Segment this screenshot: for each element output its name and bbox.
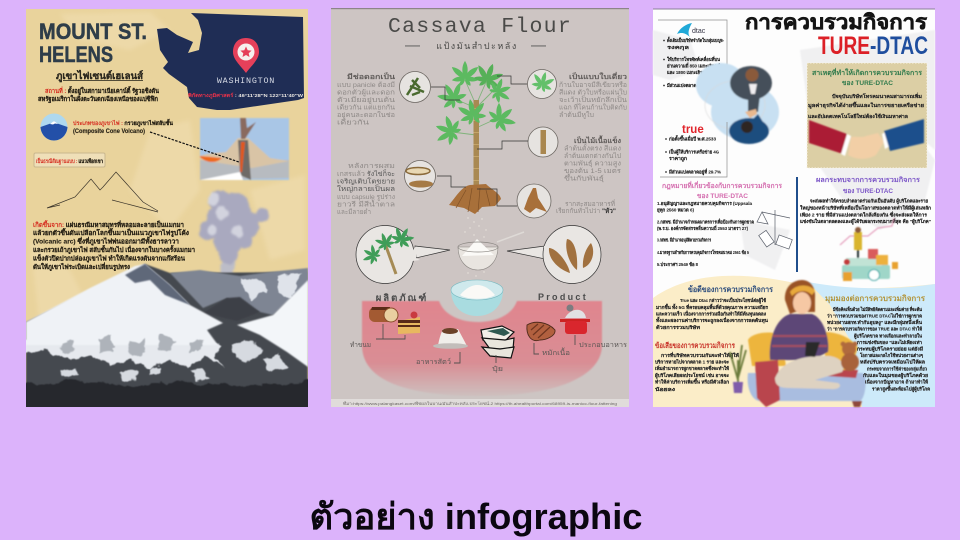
text: flower: ตัวเมียอยู่บนต้น <box>337 96 396 104</box>
text: perspective: ว่า "การควบรวมกิจการของ TRUE และ DTAC ทำให้ <box>827 326 922 332</box>
icon: layer cake <box>398 312 420 334</box>
legs <box>775 356 844 389</box>
icon: red pot <box>560 304 590 334</box>
text: perspective: กระทบจากการใช้ค่าของกลุ่มเกี่ยว <box>867 364 927 372</box>
box: dtac facts <box>658 20 727 89</box>
text: perspective: กับและในมุมของผู้บริโภคด้วย <box>863 372 928 380</box>
text: flower: มีช่อดอกเป็น <box>347 72 395 81</box>
text: how it formed: แล้วยกตัวขึ้นดันเปลือกโลกขึ้นมาเป็นแนวภูเขาไฟรูปโค้ง <box>33 227 189 238</box>
text: perspective: ราคาสูงขึ้นสะท้อนไปสู่ผู้บริโภค <box>872 384 930 394</box>
sofa <box>748 373 866 401</box>
text: how it formed: และกรวยเถ้าภูเขาไฟ สลับชั้นกันไป เนื่องจากในบางครั้งแมกมา <box>33 244 195 255</box>
true bullets: ก่อตั้งขึ้นเมื่อปี พ.ศ.2533 <box>669 134 716 142</box>
icon: flour bowl <box>451 280 503 316</box>
product labels <box>350 341 627 373</box>
text: disadvantages <box>655 351 739 393</box>
text: perspective: ว่า "การควบรวมของTRUE DTACไม่ใช่การผูกขาด <box>827 312 922 320</box>
product labels: ประกอบอาหาร <box>579 342 627 349</box>
title: Cassava Flour <box>388 15 572 39</box>
title: HELENS <box>39 42 113 67</box>
text: reasons: ปัจจุบันบริษัทโทรคมนาคมสามารถเพิ่ม <box>832 92 922 100</box>
roots <box>449 184 501 214</box>
text: disadvantages: บริการหายไปจากตลาด 1 ราย และจะ <box>655 358 729 366</box>
text: landform badge: เป็นธรณีสัณฐานแบบ : แนวเทือกเขา <box>36 157 103 165</box>
text: laws list: 5.ประกาศฯ 2549 ข้อ 8 <box>657 261 698 268</box>
title <box>39 19 147 67</box>
text: laws list: 2.กสทช. มีอำนาจกำหนดมาตรการเพื่อป้องกันการผูกขาด <box>657 218 754 226</box>
callout: cassava plant bubble <box>356 222 450 284</box>
heading: impact: ผลกระทบจากการควบรวมกิจการ <box>816 176 920 184</box>
text: flower: แบบ panicle ต้องมี <box>337 81 395 89</box>
text: stem: ตามพันธุ์ ความสูง <box>564 160 621 168</box>
box: true facts <box>660 122 727 177</box>
heading: disadvantages: ข้อเสียของการควบรวมกิจการ <box>655 341 736 350</box>
text: how it formed: ดันให้ภูเขาไฟระเบิดและเปลี่ยนรูปทรง <box>33 261 130 272</box>
text: fruit: หลังการผสม <box>348 162 395 170</box>
box: reasons for merger <box>807 63 927 168</box>
faint map background <box>653 30 935 270</box>
text: perspective <box>827 305 930 394</box>
caption: ตัวอย่าง infographic: ตัวอย่าง infographic <box>310 496 642 537</box>
icon: root circle <box>517 184 551 218</box>
icon: handshake <box>809 119 924 159</box>
text: leaf: จะเว้าเป็นหยักลึกเป็น <box>559 95 628 104</box>
title: การควบรวมกิจการ <box>745 11 927 34</box>
text: leaf: แฉก ที่โคนก้านใบติดกับ <box>559 102 627 112</box>
heading: perspective: มุมมองต่อการควบรวมกิจการ <box>825 294 926 304</box>
teddy <box>842 342 856 356</box>
mottled snow patches <box>60 335 204 356</box>
text: root: รากสะสมอาหารที่ <box>565 199 615 208</box>
text: volcano type <box>73 118 173 135</box>
world-map background blobs <box>30 12 305 330</box>
text: flower <box>337 72 396 126</box>
text: leaf <box>559 71 628 119</box>
crater wall <box>170 268 308 315</box>
text: flower: เดียวกัน แต่แยกกัน <box>337 104 396 112</box>
product labels: ปุ๋ย <box>492 365 503 373</box>
product labels: หมักเนื้อ <box>542 346 570 357</box>
text: perspective: หน่วยงานสกท.ทำกันอุบลงู" และมีกลุ่มหนึ่งเห็น <box>827 318 923 327</box>
callout: cassava root bubble <box>507 226 601 284</box>
subtitle: ภูเขาไฟเซนต์เฮเลนส์ <box>56 69 144 83</box>
text: how it formed: (Volcanic arc) ซึ่งที่ภูเขาไฟพ่นออกมามีทั้งธารลาวา <box>33 236 179 246</box>
text: impact: เพียง 2 ราย ที่มีส่วนแบ่งตลาดใกล้เคียงกัน ซึ่งจะส่งผลให้การ <box>800 210 927 218</box>
icon: roll cake <box>369 307 398 322</box>
true bullets: มีส่วนแบ่งตลาดอยู่ที่ 29.7% <box>669 168 722 176</box>
heading: products English: Product <box>538 292 588 302</box>
text: laws list: 4.มาตรฐานสำหรับการควบคุมกิจการโทรคมนาคม 2561 ข้อ 5 <box>657 249 749 256</box>
text: stem: ของต้น 1-5 เมตร <box>564 167 622 175</box>
text: laws list: (พ.ร.บ. องค์กรจัดสรรคลื่นความถี่ 2553 มาตรา 27) <box>657 224 748 232</box>
text: fruit <box>337 162 395 216</box>
illustration: two businessmen shaking hands <box>696 63 779 144</box>
left snow upper mass <box>26 264 223 345</box>
icon: leaf circle <box>528 69 557 98</box>
dtac bullets: มีส่วนแบ่งตลาด 22.7 % <box>667 82 712 89</box>
left snow lower edge <box>20 340 226 368</box>
illustration: cassava plant <box>431 59 522 214</box>
leaf clusters <box>431 59 522 149</box>
product labels: อาหารสัตว์ <box>416 358 451 366</box>
text: how it formed: แข็งตัวปิดปากปล่องภูเขาไฟ ทำให้เกิดแรงดันจากแก๊สร้อน <box>33 254 186 264</box>
text: impact <box>800 196 931 226</box>
text: advantages: มากขึ้น ทั้ง 5G ที่ครอบคลุมพื้นที่ด้วยคุณภาพ ความเสถียร <box>656 303 768 311</box>
heading: products Thai: ผลิตภัณฑ์ <box>376 292 428 304</box>
text: flower: อยู่คนละดอกในช่อ <box>337 111 395 119</box>
text: location: สถานที่ : ตั้งอยู่ในสกามาเนียเคาน์ตี้ รัฐวอชิงตัน <box>45 85 160 96</box>
text: disadvantages: การที่บริษัทควบรวมกันจะทำให้ผู้ให้ <box>661 351 739 360</box>
plant <box>730 345 746 393</box>
label: Washington: WASHINGTON <box>217 76 275 86</box>
source footer: ที่มา:https://www.palangkaset.com/พืชผลในบาน/มันสำปะหลัง-ประโยชน์-2 https://th.ahealthportal.com/68959-is-manioc-flour-fattening <box>343 401 617 406</box>
text: laws list: 1.อนุสัญญาและกฎหมายควบคุมกิจการ (Uppsala <box>657 200 752 207</box>
icon: pet food bowl <box>433 328 468 349</box>
text: disadvantages: ผู้บริโภคเสียผลประโยชน์ เช่น อาจจะ <box>655 372 729 380</box>
text: root <box>556 199 616 215</box>
text: stem: เป็นไม้เนื้อแข็ง <box>574 134 622 145</box>
mountain base and ridge <box>26 263 308 388</box>
text: advantages: True และ Dtac กล่าวว่าจะเป็นประโยชน์ต่อผู้ใช้ <box>680 296 767 305</box>
text: landform badge <box>34 153 105 167</box>
text: root: เรียกกันทั่วไปว่า "หัว" <box>556 206 616 215</box>
panel: True-DTAC merger infographic <box>653 8 935 407</box>
title: TURE-DTAC <box>818 32 928 60</box>
icon: mountain outline <box>47 172 158 212</box>
text: advantages: และความเร็ว เนื่องจากการร่วมมือกันทำให้มีต้นทุนลดลง <box>656 310 767 318</box>
text: flower: เดียวกัน <box>337 118 370 126</box>
text: stem: ลำต้นแตกต่างกันไป <box>564 152 621 160</box>
right snowfield <box>237 280 308 367</box>
product connectors <box>376 324 575 363</box>
heading: reasons <box>812 67 922 87</box>
text: leaf: ลำต้นมีหูใบ <box>559 111 594 119</box>
text: leaf: เป็นแบบใบเดี่ยว <box>569 71 627 81</box>
panel: Cassava Flour infographic <box>331 8 629 407</box>
heading: impact: ของ TURE-DTAC <box>843 188 893 195</box>
text: impact: ใหญ่ของหน้าบริษัทที่เหลือเป็นโอกาสของตลาดทำให้มีผู้เล่นหลัก <box>800 204 931 212</box>
icon: steak <box>527 322 555 341</box>
text: reasons: และอัปเดตเทคโนโลยีใหม่ต้องใช้เงินมหาศาล <box>808 113 908 120</box>
logo: dtac: dtac <box>692 28 706 35</box>
text: leaf: ก้านใบอาจมีสีเขียวหรือ <box>559 81 627 89</box>
true bullets <box>665 134 722 176</box>
dtac bullets: ย่านความถี่ 850 เมกะเฮิรตซ์ <box>667 62 721 70</box>
text: advantages: ด้วยการรวมบริษัท <box>656 324 700 331</box>
text: disadvantages: น้อยลง <box>655 386 676 393</box>
text: fruit: เจริญเติบโตขยาย <box>337 178 395 186</box>
falling flour particles <box>464 217 487 285</box>
text: perspective: เนื่องจากปัญหาอาจ ถ้ามาทำให้ <box>865 378 928 386</box>
text: stem: ลำต้นตั้งตรง สีแดง <box>564 144 621 152</box>
text: flower: ดอกตัวผู้และดอก <box>337 88 395 96</box>
text: advantages: ทั้งและผลงานค่าบริการจะถูกลงเนื่องจากการลดต้นทุน <box>656 316 769 325</box>
text: reasons <box>808 92 924 120</box>
text: how it formed: เกิดขึ้นจาก: แผ่นธรณีมหาสมุทรที่หลอมละลายเป็นแมกมา <box>33 219 184 229</box>
icon: stem circle <box>528 127 558 157</box>
text: laws list <box>657 200 754 268</box>
dtac bullets <box>663 36 724 89</box>
text: how it formed <box>33 219 195 272</box>
photo: snow-capped mountain <box>20 264 315 415</box>
dtac bullets: ดั้งเดิมเป็นบริษัทจำกัดในกลุ่มเบญจ- <box>667 36 724 44</box>
map: Washington state <box>157 13 304 110</box>
text: perspective: หลังปรับตรวจเหมือนไปให้ผล <box>860 358 925 366</box>
text: fruit: เกสรแล้ว รังไข่ก็จะ <box>337 169 395 178</box>
icon: fruit circle <box>404 160 436 192</box>
text: fruit: ใหญ่กลายเป็นผล <box>337 184 395 193</box>
text: disadvantages: เพิ่มอำนาจการผูกขาดตลาดซึ่งจะทำให้ <box>655 364 729 373</box>
dtac bullets: ให้บริการโทรศัพท์เคลื่อนที่บน <box>667 55 721 63</box>
panel: Mount St. Helens infographic <box>20 9 315 415</box>
text: impact: แข่งขันในตลาดลดลงและผู้ได้รับผลกระทบมากที่สุด คือ "ผู้บริโภค" <box>800 217 931 226</box>
dtac bullets: และ 1800 เมกะเฮิรตซ์ <box>667 69 709 76</box>
text: perspective: กระทบผู้บริโภครายย่อย แต่ยังมี <box>857 346 923 354</box>
bottom yellow background <box>653 276 935 407</box>
title: MOUNT ST. <box>39 19 147 44</box>
true bullets: เป็นผู้ให้บริการเครือข่าย 4G <box>669 148 719 156</box>
photo: eruption smoke plume <box>199 190 269 300</box>
heading: impact <box>816 176 920 195</box>
text: impact: จะส่งผลทำให้ครอบงำตลาดร่วมกันเป็นอันดับ ผู้บริโภคและราย <box>810 196 928 206</box>
text: fruit: และมีลายดำ <box>337 208 371 216</box>
phone <box>805 342 820 357</box>
dtac bullets: รงคกุล <box>667 45 689 51</box>
text: stem <box>564 134 622 182</box>
product labels: ทำขนม <box>350 341 371 349</box>
icon: map pin <box>233 38 259 73</box>
text: perspective: มีข้อคิดเห็นด้วย ไม่มีสิทธิติดตามและเพิ่มค่าย ที่จะต้น <box>833 305 923 313</box>
text: volcano type: ประเภทของภูเขาไฟ : กรวยภูเขาไฟสลับชั้น <box>73 118 173 128</box>
heading: laws: ของ TURE-DTAC <box>697 193 748 200</box>
text: fruit: แบบ capsule รูปร่าง <box>337 194 395 201</box>
red product zone <box>362 301 602 396</box>
text: advantages <box>656 296 769 331</box>
icon: cone volcano circle <box>40 114 68 140</box>
heading: laws: กฎหมายที่เกี่ยวข้องกับการควบรวมกิจการ <box>662 180 782 190</box>
illustration: business growth <box>840 218 898 281</box>
diagram: volcano cross-section <box>200 118 289 180</box>
arrow: dashed pointer to volcano <box>150 132 239 162</box>
illustration: woman on sofa with phone <box>730 280 866 407</box>
source footer <box>331 399 629 407</box>
heading: reasons: ของ TURE-DTAC <box>842 80 893 87</box>
true bullets: ราคาถูก <box>669 156 687 163</box>
stems <box>452 80 498 135</box>
icon: sieve of flour <box>458 232 524 270</box>
text: location <box>38 85 160 104</box>
text: laws list: 3.กสทช. มีอำนาจอนุมัติควบรวมกิจการ <box>657 236 711 244</box>
text: perspective: การแข่งขันของ "และไม่เพียงเท่า <box>857 339 922 346</box>
heading: laws <box>662 180 782 200</box>
peak shadow <box>125 264 190 305</box>
torso <box>770 314 828 360</box>
head <box>785 280 815 314</box>
text: location: สหรัฐอเมริกาในฝั่งตะวันตกเฉียงเหนือของแปซิฟิก <box>38 93 158 104</box>
icon: fertilizer sacks <box>481 326 514 358</box>
text: leaf: สีแดง ตัวใบหรือแผ่นใบ <box>559 88 627 96</box>
logo: true: true <box>682 124 704 136</box>
text: fruit: ยาวรี มีสีน้ำตาล <box>337 200 395 208</box>
icon: scales and documents <box>757 210 792 249</box>
text: volcano type: (Composite Cone Volcano) <box>73 128 145 135</box>
text: disadvantages: ทำให้ค่าบริการเพิ่มขึ้น หรือมีตัวเลือก <box>655 378 729 386</box>
connector lines <box>431 76 528 206</box>
label: coordinates: พิกัดทางภูมิศาสตร์ : 46°11′28″N 122°11′40″W <box>188 92 303 100</box>
text: stem: ขึ้นกับพันธุ์ <box>564 174 604 182</box>
icon: flower circle <box>400 72 430 102</box>
title <box>745 11 928 60</box>
heading: advantages: ข้อดีของการควบรวมกิจการ <box>688 284 774 294</box>
dark foreground <box>26 378 308 407</box>
text: laws list: ยุทุก 2560 หมวด 6) <box>657 208 694 214</box>
lava dome <box>203 297 260 321</box>
text: reasons: มูลค่าธุรกิจได้ง่ายขึ้นและในการขยายเครือข่าย <box>808 100 924 110</box>
text: perspective: โอกาสและกลไกใช้หน่วยงานต่างๆ <box>859 352 923 359</box>
divider: blue vertical bar <box>796 177 798 272</box>
trunk <box>474 100 479 190</box>
subtitle: แป้งมันสำปะหลัง <box>436 41 518 51</box>
text: perspective: ผู้บริโภคขาด ทางเลือกและทำลายใน <box>854 332 923 340</box>
bottom blue background <box>808 282 935 407</box>
heading: reasons: สาเหตุที่ทำให้เกิดการควบรวมกิจการ <box>812 67 922 77</box>
